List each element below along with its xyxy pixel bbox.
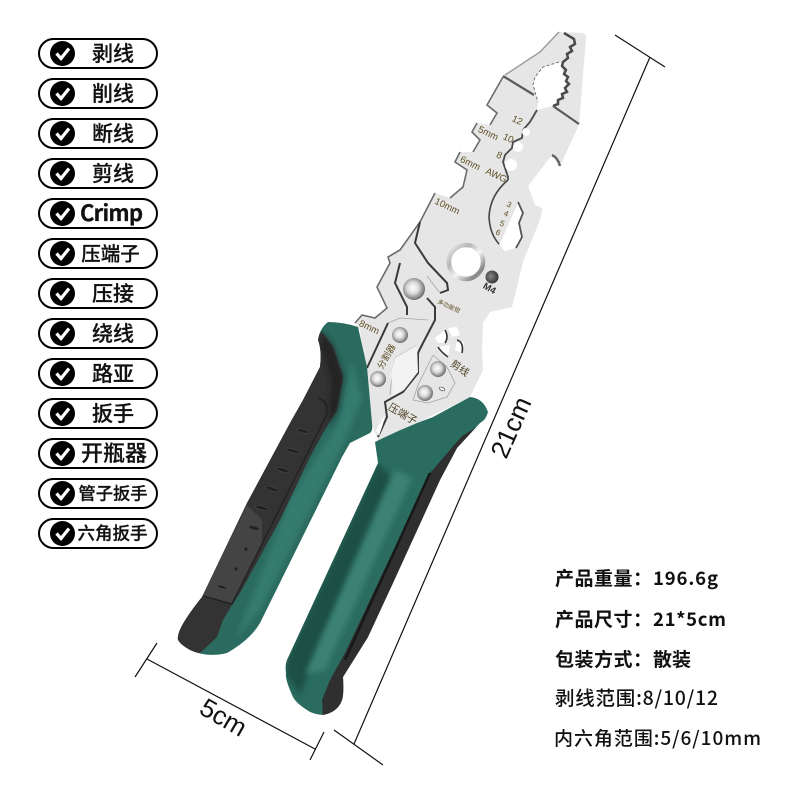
steel engraved labels: M4 xyxy=(481,281,498,297)
width line xyxy=(135,643,324,760)
steel engraved labels: AWG xyxy=(484,166,509,185)
spec: stripping range: 剥线范围:8/10/12 xyxy=(555,682,718,711)
M4 hole xyxy=(486,270,498,284)
wrench slot xyxy=(499,202,523,252)
spec: packaging: 散装 xyxy=(653,645,691,672)
steel engraved labels: 3 xyxy=(505,200,513,210)
width label: 5cm xyxy=(195,692,252,742)
badge: 剥线: 剥线 xyxy=(92,38,134,68)
feature badge list xyxy=(39,38,157,548)
pivot balls xyxy=(370,278,446,401)
grip channel xyxy=(345,473,430,660)
badge: 绕线: 绕线 xyxy=(92,318,134,348)
blade joint lines xyxy=(367,222,448,437)
steel engraved labels: 8mm xyxy=(357,318,381,337)
steel engraved labels: 10mm xyxy=(433,196,461,217)
badge: 绕线 xyxy=(39,318,157,348)
bottle opener hook xyxy=(552,155,560,166)
curved slot edge xyxy=(489,180,508,245)
left edge shading xyxy=(355,77,503,323)
steel engraved labels: 剪线 xyxy=(448,355,473,379)
badge: 削线 xyxy=(39,78,157,108)
right handle xyxy=(286,397,488,720)
edge shading xyxy=(505,32,559,75)
left gap xyxy=(376,415,385,436)
dark green edge xyxy=(286,463,392,695)
badge: Crimp: Crimp xyxy=(80,196,143,228)
dimension: 5cm xyxy=(135,643,324,760)
jaw cavity xyxy=(533,62,566,110)
spec: size: 产品尺寸： xyxy=(555,605,652,632)
badge: 断线: 断线 xyxy=(92,118,134,148)
cavity dashed edge xyxy=(533,62,559,102)
spec: packaging: 包装方式： xyxy=(555,645,652,672)
badge: 六角扳手: 六角扳手 xyxy=(78,520,148,546)
steel body xyxy=(355,32,586,440)
badge: 路亚: 路亚 xyxy=(92,358,134,388)
badge: 管子扳手 xyxy=(39,479,157,508)
grip channel line xyxy=(203,398,327,604)
badge: Crimp xyxy=(39,196,157,228)
steel engraved labels: 6 xyxy=(494,228,502,238)
badge: 剪线: 剪线 xyxy=(92,158,134,188)
rubber shade xyxy=(322,332,343,425)
jaw teeth xyxy=(553,33,575,106)
lighter grip patch xyxy=(202,505,262,604)
badge: 压端子 xyxy=(39,238,157,268)
cutter opening xyxy=(391,345,418,395)
steel engraved labels: 12 xyxy=(510,114,524,128)
badge: 管子扳手: 管子扳手 xyxy=(78,480,148,504)
green highlight xyxy=(240,368,362,631)
length label: 21cm xyxy=(484,392,537,462)
steel engraved labels: 10 xyxy=(501,132,515,146)
wrench slot teeth xyxy=(516,202,523,248)
grip ribs xyxy=(217,428,309,590)
green grip xyxy=(178,322,372,655)
badge: 压接 xyxy=(39,278,157,308)
steel engraved labels: 4 xyxy=(502,209,510,219)
badge: 剥线 xyxy=(39,38,157,68)
jaw joint lines xyxy=(503,76,579,124)
steel engraved labels xyxy=(357,114,524,428)
length line xyxy=(334,35,665,765)
badge: 扳手 xyxy=(39,398,157,428)
black rubber xyxy=(322,425,480,720)
steel engraved labels: 分割器 xyxy=(374,341,398,371)
spec: size xyxy=(555,605,726,632)
small slot mark xyxy=(439,386,445,392)
badge: 六角扳手 xyxy=(39,519,157,548)
badge: 剪线 xyxy=(39,158,157,188)
spec: weight: 产品重量： xyxy=(555,564,652,591)
left handle xyxy=(165,322,372,660)
spec: size: 21*5cm xyxy=(653,606,726,632)
badge: 开瓶器 xyxy=(39,436,157,468)
black rubber xyxy=(165,332,343,660)
spec: hex range: 内六角范围:5/6/10mm xyxy=(554,724,761,751)
spec: weight: 196.6g xyxy=(653,565,718,591)
steel engraved labels: 多功能钳 xyxy=(436,297,462,315)
hex ring xyxy=(449,245,483,279)
green grip xyxy=(286,397,488,715)
badge: 断线 xyxy=(39,118,157,148)
badge: 压接: 压接 xyxy=(92,278,134,308)
badge: 压端子: 压端子 xyxy=(81,238,140,266)
badge: 扳手: 扳手 xyxy=(92,398,134,428)
pliers tool xyxy=(165,32,586,720)
clover cutouts xyxy=(435,327,464,357)
green highlight xyxy=(305,470,412,675)
badge: 开瓶器: 开瓶器 xyxy=(81,436,147,468)
thin plate lines xyxy=(388,276,455,403)
badge: 削线: 削线 xyxy=(92,78,134,108)
spec: weight xyxy=(555,564,718,591)
badge: 路亚 xyxy=(39,358,157,388)
spec list xyxy=(554,564,761,751)
steel engraved labels: 5 xyxy=(498,219,506,229)
steel engraved labels: 5mm xyxy=(476,124,500,143)
steel engraved labels: 8 xyxy=(494,150,504,162)
steel engraved labels: 压端子 xyxy=(385,400,420,428)
steel engraved labels: 6mm xyxy=(458,154,482,173)
stripping notches xyxy=(503,110,537,180)
steel head xyxy=(355,32,586,440)
